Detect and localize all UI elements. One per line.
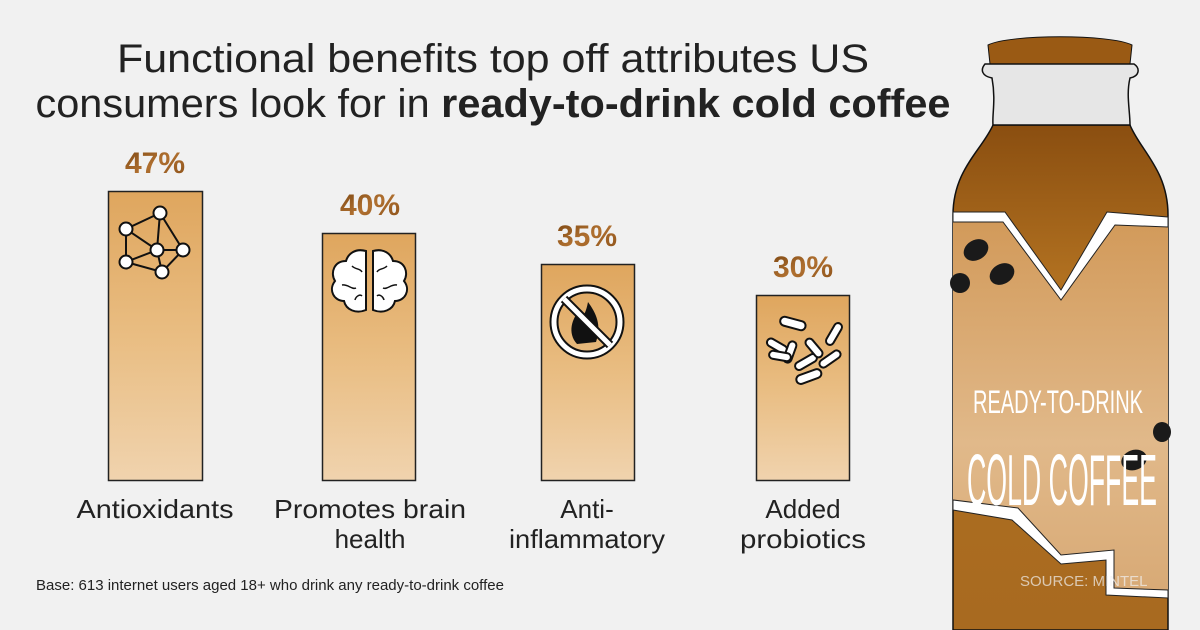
- icon: brain: [332, 250, 407, 312]
- bar: Antioxidants: 47%: [125, 147, 185, 180]
- bar: Anti-inflammatory: 35%: [557, 220, 617, 253]
- bar: Promotes brain health: Promotes brain: [274, 494, 466, 524]
- bar: Anti-inflammatory: Anti-: [560, 494, 614, 524]
- bottle illustration: [950, 37, 1171, 630]
- base note: Base: 613 internet users aged 18+ who drink any ready-to-drink coffee: [36, 577, 504, 594]
- bar: Added probiotics: probiotics: [740, 524, 866, 554]
- bar: Promotes brain health: 40%: [340, 189, 400, 222]
- bar: Anti-inflammatory: [509, 220, 665, 554]
- icon: network: [120, 206, 190, 278]
- bottle body: [953, 125, 1168, 630]
- bar: Promotes brain health: [274, 189, 466, 554]
- label: [953, 222, 1168, 590]
- bottle cap: [988, 37, 1132, 64]
- title: consumers look for in ready-to-drink cold coffee: [36, 82, 950, 126]
- title: [36, 37, 950, 126]
- title: Functional benefits top off attributes US: [117, 37, 869, 81]
- icon: coffee beans: [950, 235, 1171, 474]
- source: SOURCE: MINTEL: [1020, 573, 1148, 590]
- bar: Added probiotics: [740, 251, 866, 554]
- bar chart: [76, 147, 866, 554]
- bar: Anti-inflammatory: inflammatory: [509, 524, 665, 554]
- bar: Promotes brain health: health: [335, 524, 405, 554]
- icon: no fire: [554, 289, 620, 355]
- bar: Added probiotics: Added: [765, 494, 841, 524]
- bottle neck: [982, 64, 1138, 125]
- bar: Antioxidants: Antioxidants: [76, 494, 234, 524]
- icon: probiotics: [765, 316, 843, 385]
- bar: Antioxidants: [76, 147, 234, 524]
- bar: Added probiotics: 30%: [773, 251, 833, 284]
- bottle label text: [967, 384, 1157, 521]
